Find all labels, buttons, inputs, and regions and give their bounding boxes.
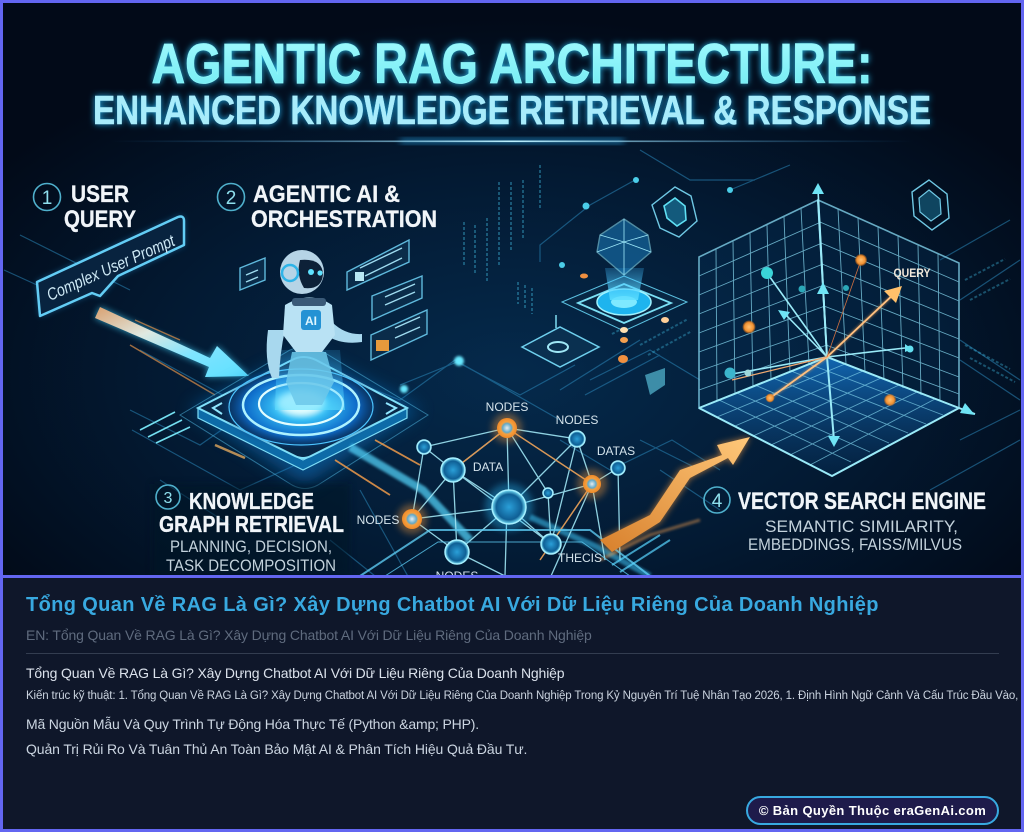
step 3 label: 3 <box>164 490 173 507</box>
connector dots <box>400 177 733 395</box>
step 3 label <box>152 484 350 576</box>
circuit board lines <box>4 150 1020 580</box>
separator bar <box>0 575 1024 578</box>
orange arrow to vector search <box>600 437 750 572</box>
step 2 label: ORCHESTRATION <box>251 206 437 233</box>
icon: hexagon chip right <box>912 180 949 230</box>
copyright badge: © Bản Quyền Thuộc eraGenAi.com <box>759 803 986 818</box>
governance line: Quản Trị Rủi Ro Và Tuân Thủ An Toàn Bảo Mật AI & Phân Tích Hiệu Quả Đầu Tư. <box>26 741 527 757</box>
agent UI cards <box>240 240 427 360</box>
copyright badge <box>746 796 999 825</box>
query vector <box>732 260 902 398</box>
graph labels: THECIS <box>558 551 602 565</box>
step 1 label <box>34 181 136 233</box>
article heading: Tổng Quan Về RAG Là Gì? Xây Dựng Chatbot AI Với Dữ Liệu Riêng Của Doanh Nghiệp <box>26 594 879 616</box>
cube axes <box>699 190 975 476</box>
step 2 label: 2 <box>226 188 236 209</box>
image background <box>0 0 1024 576</box>
step 3 label: PLANNING, DECISION, <box>170 537 332 556</box>
step 2 label <box>218 181 437 233</box>
agent platform <box>180 347 428 488</box>
title divider glow <box>110 139 914 143</box>
step 1 label: USER <box>71 181 129 208</box>
small chip platform <box>522 315 599 367</box>
robot agent <box>267 250 362 410</box>
platform feed lines <box>140 412 470 540</box>
graph base ring <box>360 530 650 576</box>
step 4 label: SEMANTIC SIMILARITY, <box>765 517 958 536</box>
title: AGENTIC RAG ARCHITECTURE: <box>152 32 872 96</box>
step 4 label <box>704 487 986 554</box>
step 1 label: 1 <box>42 188 52 209</box>
glowing band under graph <box>530 517 700 576</box>
icon: hexagon chip left <box>652 187 697 237</box>
panel: article details <box>0 578 1024 832</box>
axis arrowheads <box>778 183 975 447</box>
knowledge crystal on hex platform <box>562 219 687 331</box>
graph labels: NODES <box>556 413 598 427</box>
hero illustration: agentic RAG architecture <box>3 3 1021 576</box>
step 1 label: QUERY <box>64 206 136 233</box>
title: AGENTIC RAG ARCHITECTURE: <box>152 32 872 96</box>
graph labels: NODES <box>357 513 399 527</box>
vector points <box>724 254 914 406</box>
data columns texture <box>464 165 1015 382</box>
knowledge graph nodes <box>417 431 625 564</box>
cube floor <box>699 357 959 476</box>
vector search 3d cube <box>699 183 975 476</box>
technical architecture line: Kiến trúc kỹ thuật: 1. Tổng Quan Về RAG Là Gì? Xây Dựng Chatbot AI Với Dữ Liệu Riêng Của Doanh Nghiệp Trong Kỷ Nguyên Trí Tuệ Nhân Tạo 2026, 1. Định Hình Ngữ Cảnh Và Cấu Trúc Đầu Vào, 2 <box>26 690 1024 702</box>
summary line: Tổng Quan Về RAG Là Gì? Xây Dựng Chatbot AI Với Dữ Liệu Riêng Của Doanh Nghiệp <box>26 665 564 681</box>
step 3 label: GRAPH RETRIEVAL <box>159 511 344 537</box>
step 3 label: KNOWLEDGE <box>189 488 314 514</box>
graph labels: NODES <box>486 400 528 414</box>
graph labels <box>357 400 635 583</box>
graph labels: DATAS <box>597 444 635 458</box>
step 2 label: AGENTIC AI & <box>253 181 400 208</box>
speech bubble: complex user prompt: Complex User Prompt <box>44 231 179 305</box>
cube right wall <box>818 200 959 408</box>
knowledge graph edges <box>412 428 620 576</box>
robot agent: AI <box>305 314 317 328</box>
step 4 label: EMBEDDINGS, FAISS/MILVUS <box>748 535 962 554</box>
step 3 label: TASK DECOMPOSITION <box>166 556 336 575</box>
graph labels: DATA <box>473 460 503 474</box>
english subtitle: EN: Tổng Quan Về RAG Là Gì? Xây Dựng Chatbot AI Với Dữ Liệu Riêng Của Doanh Nghiệp <box>26 627 592 643</box>
query label: QUERY <box>894 266 930 280</box>
cube left wall <box>699 200 827 408</box>
source code line: Mã Nguồn Mẫu Và Quy Trình Tự Động Hóa Thực Tế (Python &amp; PHP). <box>26 716 479 732</box>
step 4 label: 4 <box>712 491 723 512</box>
arrow: query into agent <box>95 307 249 395</box>
